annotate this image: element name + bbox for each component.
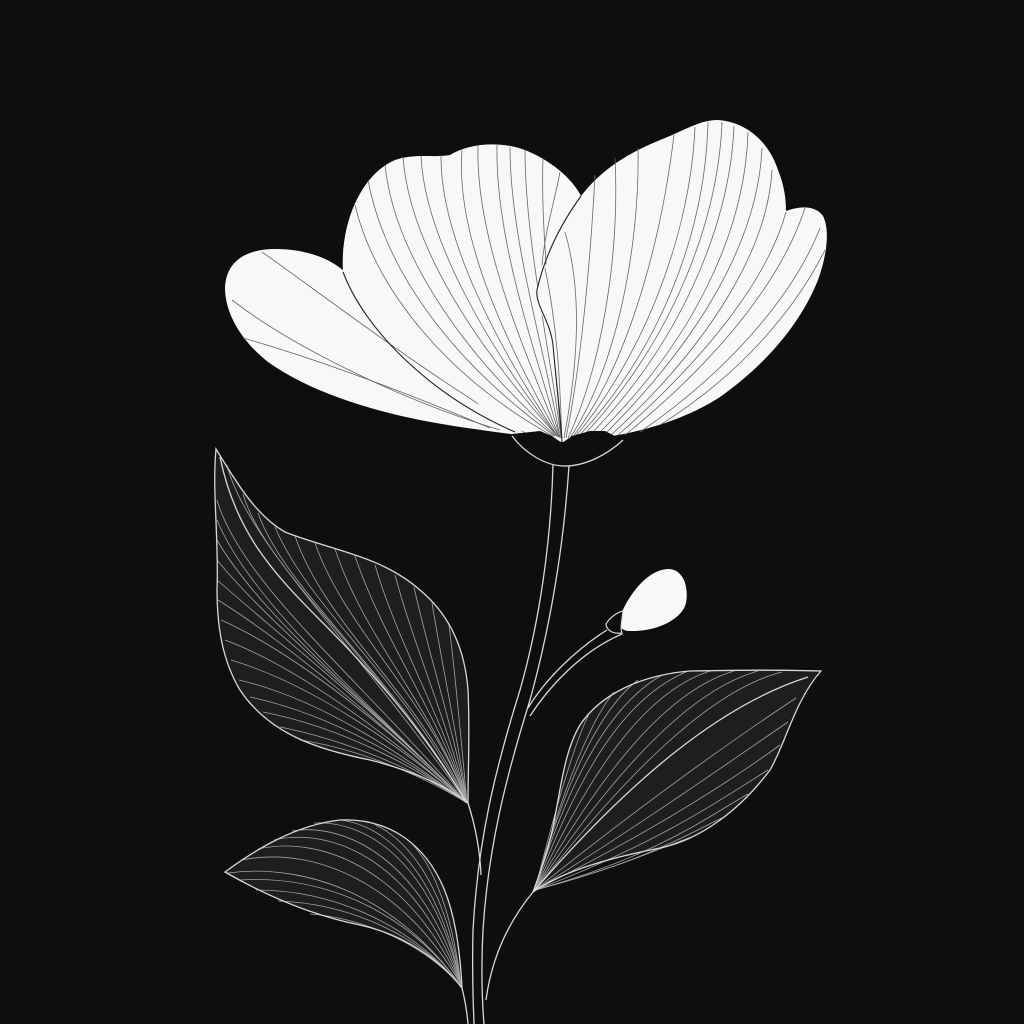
leaf: right — [486, 670, 821, 1000]
leaf: lower left — [225, 803, 481, 1024]
bud — [528, 569, 687, 716]
petal: left — [225, 249, 562, 442]
petal: right — [537, 120, 827, 442]
petal: middle — [343, 144, 600, 442]
calyx — [512, 431, 623, 466]
leaf: upper left — [215, 449, 469, 803]
stem — [473, 465, 569, 1024]
